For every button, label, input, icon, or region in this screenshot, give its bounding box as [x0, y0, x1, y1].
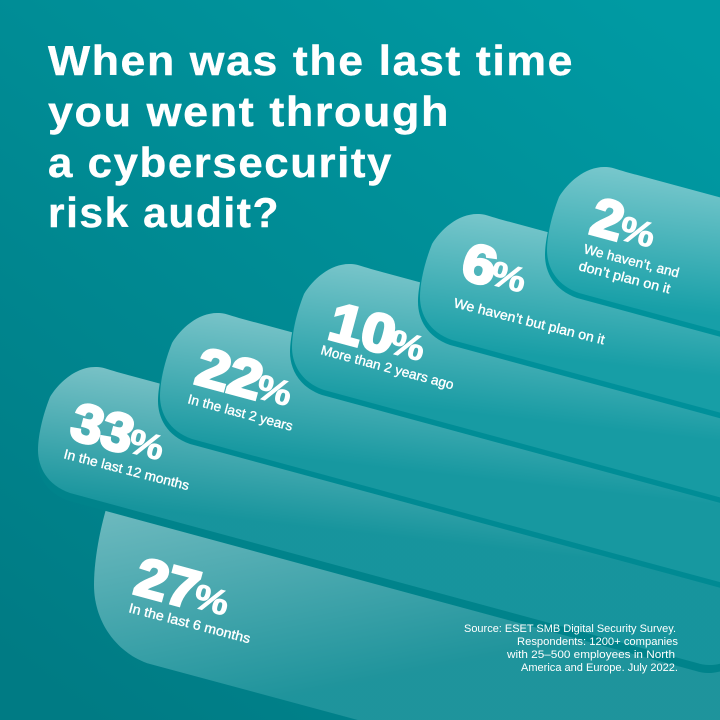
source note: Source: ESET SMB Digital Security Survey.	[464, 623, 676, 635]
value: 10%: 10	[323, 292, 402, 367]
value: 10%: %	[385, 322, 429, 369]
bar: 27% in the last 6 months	[94, 490, 720, 720]
value: 33%	[65, 392, 172, 474]
value: 33%: 33	[65, 392, 140, 466]
source note: with 25–500 employees in North	[506, 649, 675, 661]
value: 2%: %	[615, 209, 659, 256]
label: in the last 6 months: In the last 6 months	[127, 600, 252, 646]
value: 6%	[456, 232, 534, 306]
value: 27%: %	[189, 577, 233, 624]
value: 22%	[190, 337, 300, 420]
value: 33%: %	[124, 422, 168, 468]
title: When was the last time	[48, 37, 574, 84]
label: we haven't, and don't plan on it	[577, 241, 681, 297]
source note: Respondents: 1200+ companies	[517, 636, 678, 648]
bar: 2% we haven't and don't plan on it	[545, 167, 720, 470]
title: risk audit?	[48, 189, 280, 236]
value: 22%: 22	[190, 337, 269, 412]
source note: America and Europe. July 2022.	[521, 662, 678, 674]
value: 22%: %	[252, 367, 296, 414]
source note	[464, 623, 678, 674]
title: a cybersecurity	[48, 139, 393, 186]
bar: 33% in the last 12 months	[37, 367, 720, 673]
label: we haven't, and don't plan on it: We haven’t, and	[582, 241, 681, 280]
label: more than 2 years ago: More than 2 years ago	[319, 342, 455, 392]
title	[48, 37, 574, 236]
label: we haven't but plan on it: We haven’t but plan on it	[452, 295, 607, 347]
value: 10%	[323, 292, 433, 375]
title: you went through	[48, 88, 450, 135]
label: in the last 12 months: In the last 12 months	[62, 446, 191, 493]
value: 6%: %	[486, 254, 530, 301]
value: 27%	[129, 547, 237, 629]
value: 2%: 2	[585, 187, 630, 253]
bar: 10% more than 2 years ago	[290, 264, 720, 567]
label: in the last 2 years: In the last 2 years	[186, 391, 295, 434]
value: 2%	[585, 187, 663, 261]
bar: 22% in the last 2 years	[158, 313, 720, 616]
label: we haven't, and don't plan on it: don’t plan on it	[577, 258, 672, 297]
bar: 6% we haven't but plan on it	[418, 214, 720, 517]
value: 27%: 27	[129, 547, 206, 621]
value: 6%: 6	[456, 232, 503, 298]
